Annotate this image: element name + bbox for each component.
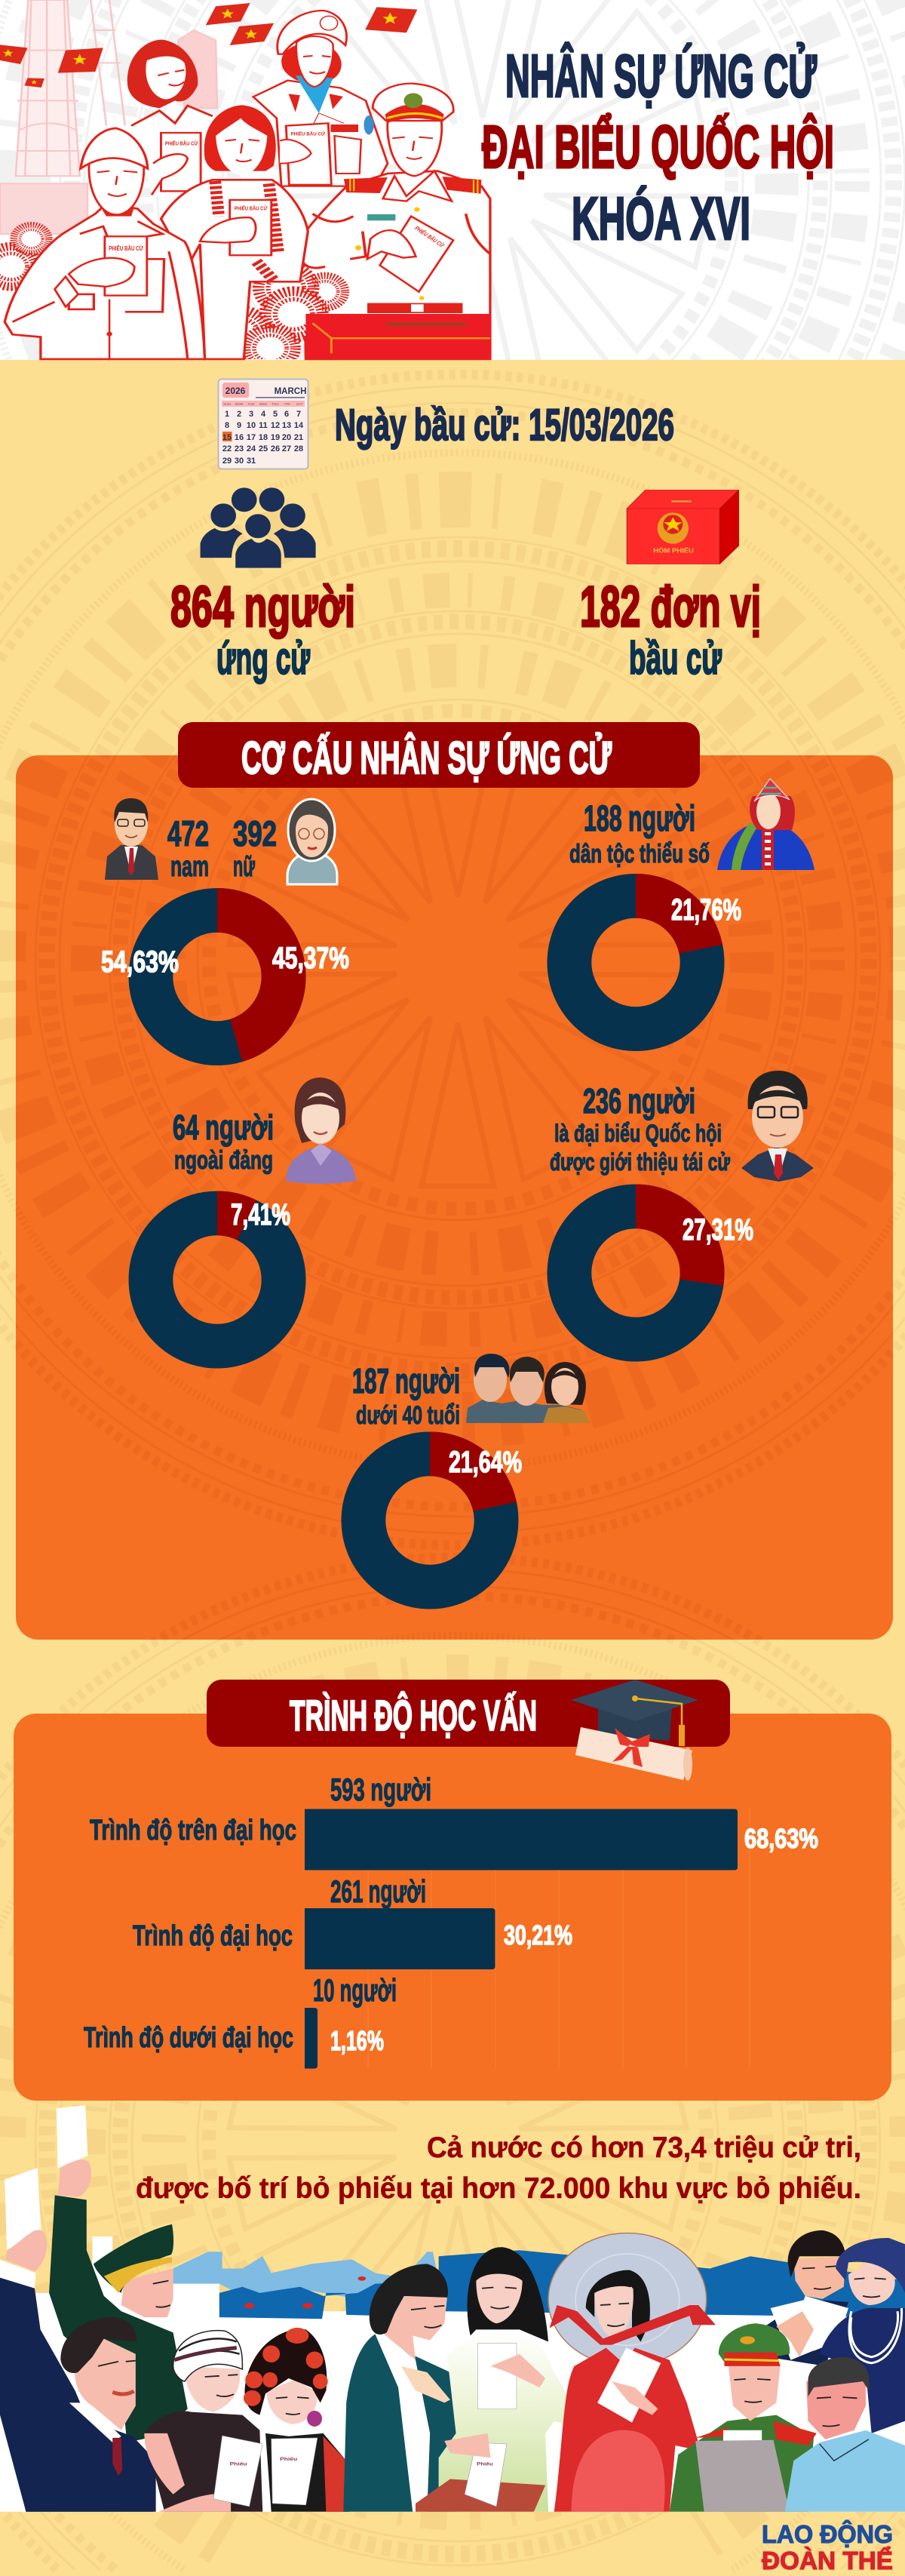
label: 472 men: nam: [170, 851, 209, 883]
figure: man in light blue shirt: [785, 2357, 905, 2512]
icon: three young people: [466, 1354, 590, 1423]
bar row: above university: 593 người: [330, 1772, 431, 1807]
icon: calendar March 2026: 13: [282, 421, 291, 430]
icon: calendar March 2026: [219, 379, 308, 469]
stat: 864 candidates: [170, 575, 355, 684]
icon: calendar March 2026: 17: [247, 433, 256, 442]
figure: woman at back: [127, 40, 213, 201]
icon: calendar March 2026: 25: [259, 444, 268, 453]
bar row: above university: Trình độ trên đại học: [90, 1815, 296, 1846]
figure: man in dark suit: [17, 2317, 156, 2512]
icon: calendar March 2026: TUE: [247, 402, 255, 406]
label: 236 re-nominated deputies: 236 người: [583, 1081, 695, 1120]
election date: Ngày bầu cử: 15/03/2026: [335, 401, 674, 450]
header illustration: voters in red paper-cut style: [0, 0, 490, 368]
label: 187 under 40: 187 người: [352, 1361, 460, 1400]
city tower background: [0, 0, 217, 234]
icon: calendar March 2026: 16: [235, 433, 244, 442]
label: 64 non-party: [173, 1108, 274, 1175]
icon: calendar March 2026: FRI: [284, 402, 290, 406]
bar row: university: Trình độ đại học: [133, 1920, 293, 1952]
donut: re-nominated deputies: [569, 1207, 702, 1339]
stat: 864 candidates: 864 người: [170, 575, 355, 639]
logo: Lao Dong Doan The: LAO ĐỘNG: [762, 2519, 893, 2548]
bar row: university: 30,21%: [504, 1920, 572, 1950]
label: 392 women: 392: [233, 813, 277, 853]
bar row: above university: [90, 1772, 818, 1870]
bar row: university: [133, 1874, 572, 1969]
icon: calendar March 2026: 12: [271, 421, 280, 430]
figure: police man: PHIẾU BẦU CỬ: [413, 224, 446, 248]
icon: calendar March 2026: 14: [294, 421, 304, 430]
icon: ethnic woman in blue: [717, 779, 814, 870]
icon: calendar March 2026: 5: [273, 410, 278, 419]
flags: [0, 3, 417, 88]
bar row: university: 261 người: [330, 1874, 426, 1909]
label: 392 women: [233, 813, 277, 883]
icon: calendar March 2026: 3: [249, 410, 253, 419]
header banner: [0, 0, 905, 361]
donut: gender: [151, 910, 284, 1044]
icon: calendar March 2026: 18: [259, 433, 268, 442]
figure: worker man: PHIẾU BẦU CỬ: [109, 244, 143, 252]
icon: calendar March 2026: 11: [259, 421, 268, 430]
figure: woman in blue turban right: [820, 2238, 905, 2433]
figure: woman at back: PHIẾU BẦU CỬ: [165, 140, 198, 146]
bar row: below university: 1,16%: [330, 2025, 384, 2056]
icon: calendar March 2026: 10: [247, 421, 256, 430]
figure: young man right: [765, 2230, 848, 2366]
icon: calendar March 2026: 7: [296, 410, 301, 419]
figure: older ethnic woman with head scarf: Phiếu: [230, 2461, 247, 2467]
figure: woman in the middle: [161, 105, 308, 359]
figure: woman in the middle: PHIẾU BẦU CỬ: [235, 204, 267, 211]
label: 472 men: 472: [167, 813, 209, 853]
heading: education level: [207, 1680, 730, 1747]
icon: calendar March 2026: 21: [294, 433, 303, 442]
icon: calendar March 2026: 6: [284, 410, 289, 419]
main title: [482, 42, 834, 252]
icon: red ballot box: HÒM PHIẾU: [653, 546, 694, 555]
donut: under 40: [364, 1454, 496, 1587]
icon: calendar March 2026: 4: [261, 410, 266, 419]
figure: woman officer: [253, 11, 388, 186]
label: 54,63%: 54,63%: [101, 945, 179, 979]
panel: candidate structure: [16, 722, 893, 1640]
figure: police officer: [670, 2323, 817, 2512]
city skyline: [0, 2236, 905, 2512]
panel: education level: [14, 1680, 891, 2101]
donut: non-party: [151, 1213, 284, 1346]
icon: calendar March 2026: 19: [271, 433, 280, 442]
icon: calendar March 2026: 8: [225, 421, 229, 430]
figure: woman in teal jacket voting: [343, 2264, 462, 2512]
figure: young ethnic woman with flower headdress: [244, 2328, 349, 2512]
bottom illustration: voters of many backgrounds: [0, 2105, 905, 2512]
icon: calendar March 2026: SAT: [296, 402, 302, 406]
icon: calendar March 2026: 28: [294, 444, 303, 453]
logo: Lao Dong Doan The: [762, 2519, 893, 2574]
icon: calendar March 2026: MARCH: [275, 387, 306, 396]
figure: conical hat woman in red: [548, 2233, 716, 2512]
icon: calendar March 2026: 26: [271, 444, 280, 453]
icon: calendar March 2026: 1: [225, 410, 229, 419]
stat: 182 constituencies: 182 đơn vị: [580, 575, 761, 639]
icon: older woman with glasses: [287, 799, 337, 884]
heading: candidate structure: CƠ CẤU NHÂN SỰ ỨNG CỬ: [241, 733, 612, 783]
icon: older man with glasses in navy suit: [741, 1071, 814, 1182]
heading: education level: TRÌNH ĐỘ HỌC VẤN: [290, 1691, 537, 1740]
flowers: [0, 225, 345, 368]
figure: worker man: [5, 128, 204, 359]
label: 64 non-party: ngoài đảng: [174, 1146, 273, 1175]
bar row: below university: 10 người: [313, 1972, 397, 2008]
icon: calendar March 2026: 27: [282, 444, 291, 453]
label: 236 re-nominated deputies: [550, 1081, 731, 1176]
icon: calendar March 2026: 31: [247, 456, 256, 466]
bar row: above university: 68,63%: [744, 1823, 818, 1854]
bar row: below university: Trình độ dưới đại học: [84, 2022, 293, 2054]
donut: ethnic minority: [569, 896, 702, 1029]
ballot box: [305, 314, 490, 358]
icon: calendar March 2026: 23: [235, 444, 244, 453]
label: 187 under 40: [352, 1361, 460, 1430]
icon: calendar March 2026: 15: [222, 433, 232, 442]
figure: older ethnic woman with head scarf: [144, 2331, 262, 2512]
icon: calendar March 2026: SUN: [223, 402, 231, 406]
closing statement: [136, 2132, 861, 2205]
label: 472 men: [167, 813, 209, 883]
label: 7,41%: 7,41%: [231, 1198, 290, 1231]
icon: young woman in purple: [286, 1077, 356, 1184]
icon: calendar March 2026: 9: [237, 421, 241, 430]
icon: calendar March 2026: THU: [272, 402, 279, 406]
icon: calendar March 2026: 2026: [225, 386, 246, 396]
label: 21,64%: 21,64%: [449, 1446, 522, 1479]
stat: 864 candidates: ứng cử: [216, 633, 310, 684]
icon: graduation cap and diploma: [571, 1680, 698, 1781]
icon: calendar March 2026: MON: [235, 402, 243, 406]
figure: police man: [293, 84, 490, 359]
icon: red ballot box: [627, 490, 739, 564]
bar row: below university: [84, 1972, 397, 2069]
label: 64 non-party: 64 người: [173, 1108, 274, 1147]
label: 187 under 40: dưới 40 tuổi: [356, 1401, 460, 1430]
figure: man with raised ballot: [0, 2168, 156, 2512]
label: 188 ethnic minority: 188 người: [584, 799, 695, 839]
figure: woman in white ao dai: [439, 2247, 577, 2512]
closing statement: Cả nước có hơn 73,4 triệu cử tri,: [427, 2132, 861, 2164]
label: 392 women: nữ: [233, 851, 255, 883]
ballot box and hand: Phiếu: [477, 2461, 493, 2467]
logo: Lao Dong Doan The: ĐOÀN THỂ: [762, 2547, 893, 2574]
label: 188 ethnic minority: [569, 799, 710, 868]
heading: candidate structure: [178, 722, 700, 788]
label: 236 re-nominated deputies: được giới thiệu tái cử: [550, 1148, 731, 1176]
label: 27,31%: 27,31%: [683, 1213, 753, 1247]
stat: 182 constituencies: [580, 575, 761, 684]
icon: group of people: [201, 487, 316, 568]
main title: KHÓA XVI: [572, 185, 750, 252]
icon: calendar March 2026: WED: [259, 402, 268, 406]
label: 21,76%: 21,76%: [671, 893, 741, 927]
icon: calendar March 2026: 24: [247, 444, 256, 453]
icon: man in suit: [105, 798, 158, 880]
figure: border guard soldier: [49, 2105, 188, 2442]
stat: 182 constituencies: bầu cử: [629, 633, 722, 684]
icon: calendar March 2026: 30: [235, 456, 244, 466]
ballot box and hand: [416, 2433, 545, 2512]
figure: woman officer: PHIẾU BẦU CỬ: [290, 130, 326, 137]
icon: calendar March 2026: 29: [222, 456, 232, 466]
label: 236 re-nominated deputies: là đại biểu Quốc hội: [554, 1120, 722, 1147]
closing statement: được bố trí bỏ phiếu tại hơn 72.000 khu vực bỏ phiếu.: [136, 2172, 861, 2205]
icon: calendar March 2026: 20: [282, 433, 291, 442]
label: 45,37%: 45,37%: [272, 942, 349, 975]
figure: young ethnic woman with flower headdress: Phiếu: [280, 2457, 297, 2462]
icon: calendar March 2026: 2: [237, 410, 241, 419]
label: 188 ethnic minority: dân tộc thiểu số: [569, 840, 710, 868]
icon: calendar March 2026: 22: [222, 444, 232, 453]
